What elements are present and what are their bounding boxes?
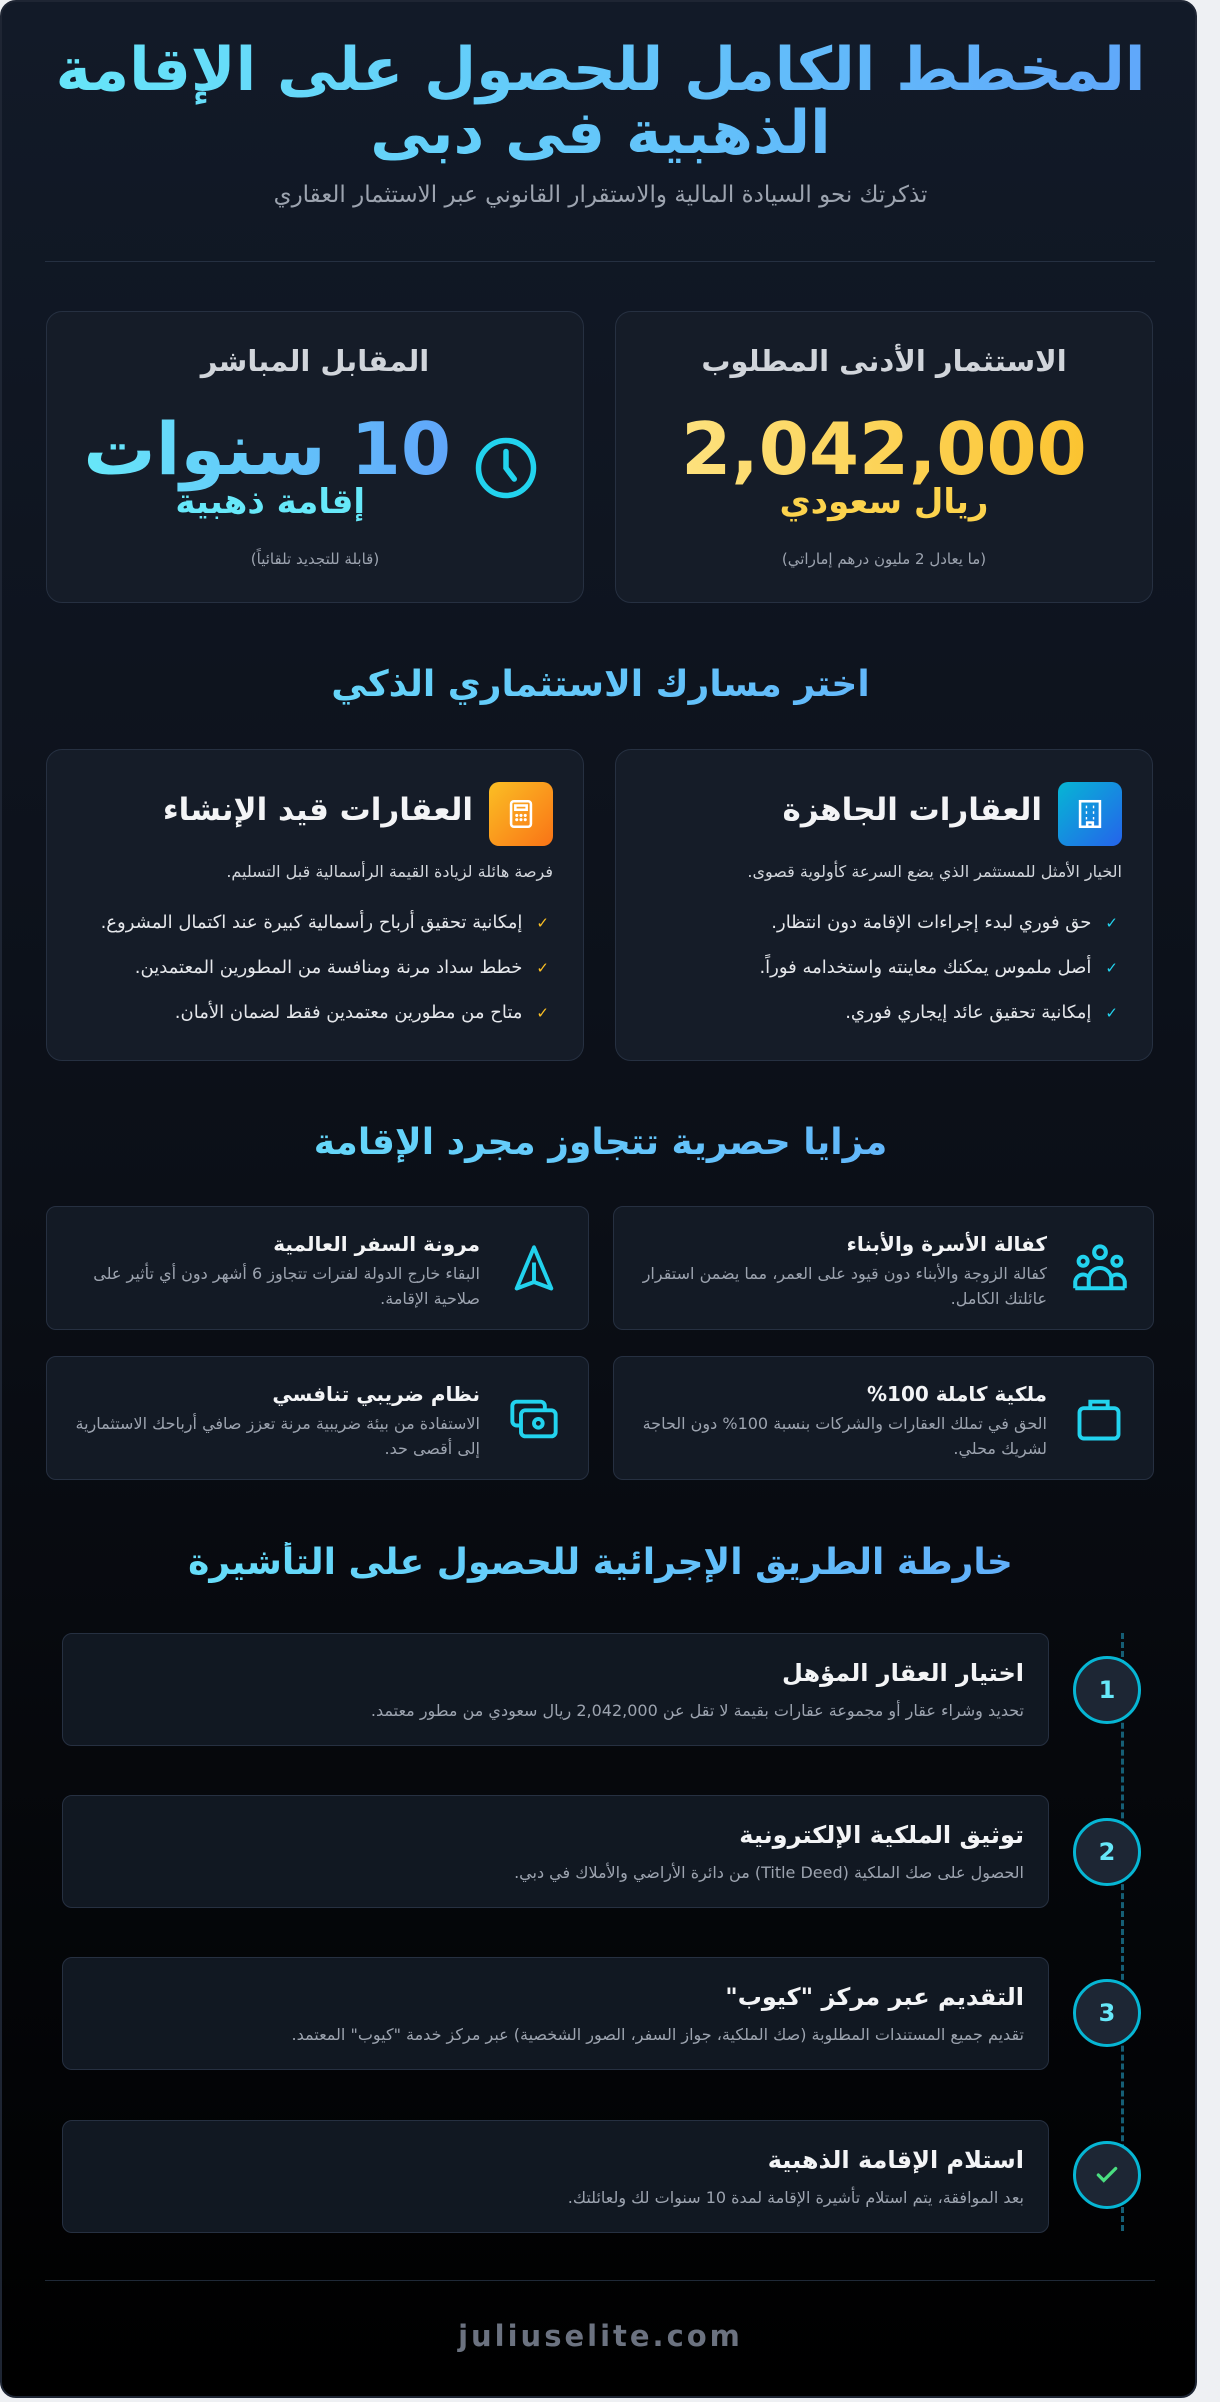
section heading: roadmap: خارطة الطريق الإجرائية للحصول على التأشيرة [188,1542,1013,1583]
icon: people [1073,1244,1127,1290]
checklist: ✓حق فوري لبدء إجراءات الإقامة دون انتظار. [771,912,1118,933]
checklist: ✓متاح من مطورين معتمدين فقط لضمان الأمان. [175,1002,549,1023]
title: المخطط الكامل للحصول على الإقامة الذهبية فى دبى [56,35,1145,168]
heading: العقارات الجاهزة [783,792,1042,828]
footer: juliuselite.com [458,2319,743,2353]
checklist: ✓خطط سداد مرنة ومنافسة من المطورين المعتمدين. [135,957,549,978]
section heading: paths [2,664,1199,705]
step 1 circle [1073,1656,1141,1724]
step 1 [62,1633,1049,1746]
title: ملكية كاملة 100% [867,1382,1047,1406]
icon: navigation [514,1245,554,1290]
step 2 [62,1795,1049,1908]
heading: العقارات قيد الإنشاء [163,792,473,828]
checklist [759,912,1118,1023]
title: كفالة الأسرة والأبناء [847,1232,1047,1256]
value: 10 سنوات [83,407,451,491]
step 3 circle [1073,1979,1141,2047]
step 4: بعد الموافقة، يتم استلام تأشيرة الإقامة لمدة 10 سنوات لك ولعائلتك. [568,2188,1024,2207]
icon: cash [510,1400,558,1438]
checklist: ✓إمكانية تحقيق أرباح رأسمالية كبيرة عند اكتمال المشروع. [101,912,549,933]
stat card: investment [615,311,1153,603]
step 2 circle: 2 [1099,1838,1115,1866]
section heading: paths: اختر مسارك الاستثماري الذكي [331,664,870,705]
benefit: ownership [613,1356,1154,1480]
step 2: توثيق الملكية الإلكترونية [739,1821,1024,1849]
currency: ريال سعودي [780,482,988,522]
text: البقاء خارج الدولة لفترات تتجاوز 6 أشهر دون أي تأثير على صلاحية الإقامة. [93,1264,480,1308]
panel: ready properties [615,749,1153,1061]
text: الاستفادة من بيئة ضريبية مرنة تعزز صافي أرباحك الاستثمارية إلى أقصى حد. [76,1414,480,1458]
benefit: family [613,1206,1154,1330]
step 1: تحديد وشراء عقار أو مجموعة عقارات بقيمة لا تقل عن 2,042,000 ريال سعودي من مطور معتمد. [371,1701,1024,1720]
description: الخيار الأمثل للمستثمر الذي يضع السرعة كأولوية قصوى. [747,862,1122,881]
checklist [101,910,549,1023]
timeline dashed line [1121,1633,1124,2231]
step 1: اختيار العقار المؤهل [782,1659,1024,1687]
step 3: التقديم عبر مركز "كيوب" [725,1983,1024,2011]
benefit: tax [46,1356,589,1480]
title: مرونة السفر العالمية [273,1232,480,1256]
icon: clock [476,438,536,498]
step 3: تقديم جميع المستندات المطلوبة (صك الملكية، جواز السفر، الصور الشخصية) عبر مركز خدمة "كيوب" المعتمد. [292,2025,1024,2044]
checklist: ✓إمكانية تحقيق عائد إيجاري فوري. [845,1002,1118,1023]
note: (قابلة للتجديد تلقائياً) [251,550,379,568]
text: الحق في تملك العقارات والشركات بنسبة 100% دون الحاجة لشريك محلي. [643,1414,1047,1458]
step 2: الحصول على صك الملكية (Title Deed) من دائرة الأراضي والأملاك في دبي. [514,1863,1024,1882]
text: كفالة الزوجة والأبناء دون قيود على العمر، مما يضمن استقرار عائلتك الكامل. [643,1264,1047,1308]
panel: off-plan properties [46,749,584,1061]
step 4 circle: check [1073,2141,1141,2209]
section heading: roadmap [2,1542,1199,1583]
checklist: ✓أصل ملموس يمكنك معاينته واستخدامه فوراً. [759,957,1118,978]
number: 2,042,000 [681,407,1087,491]
title: نظام ضريبي تنافسي [272,1382,480,1406]
icon: building [1058,782,1122,846]
stat card: return [46,311,584,603]
sub label: إقامة ذهبية [175,482,365,522]
step 2 circle [1073,1818,1141,1886]
step 4 [62,2120,1049,2233]
benefit: travel [46,1206,589,1330]
note: (ما يعادل 2 مليون درهم إماراتي) [782,550,986,568]
step 3 circle: 3 [1099,1999,1115,2027]
section heading: benefits: مزايا حصرية تتجاوز مجرد الإقامة [314,1122,887,1163]
icon: briefcase [1078,1400,1120,1440]
icon: calculator [489,782,553,846]
section heading: benefits [2,1122,1199,1163]
description: فرصة هائلة لزيادة القيمة الرأسمالية قبل التسليم. [226,862,553,881]
heading: الاستثمار الأدنى المطلوب [701,344,1067,378]
subtitle: تذكرتك نحو السيادة المالية والاستقرار القانوني عبر الاستثمار العقاري [274,182,927,208]
heading: المقابل المباشر [201,344,429,378]
step 1 circle: 1 [1099,1676,1115,1704]
step 3 [62,1957,1049,2070]
step 4: استلام الإقامة الذهبية [768,2146,1024,2174]
